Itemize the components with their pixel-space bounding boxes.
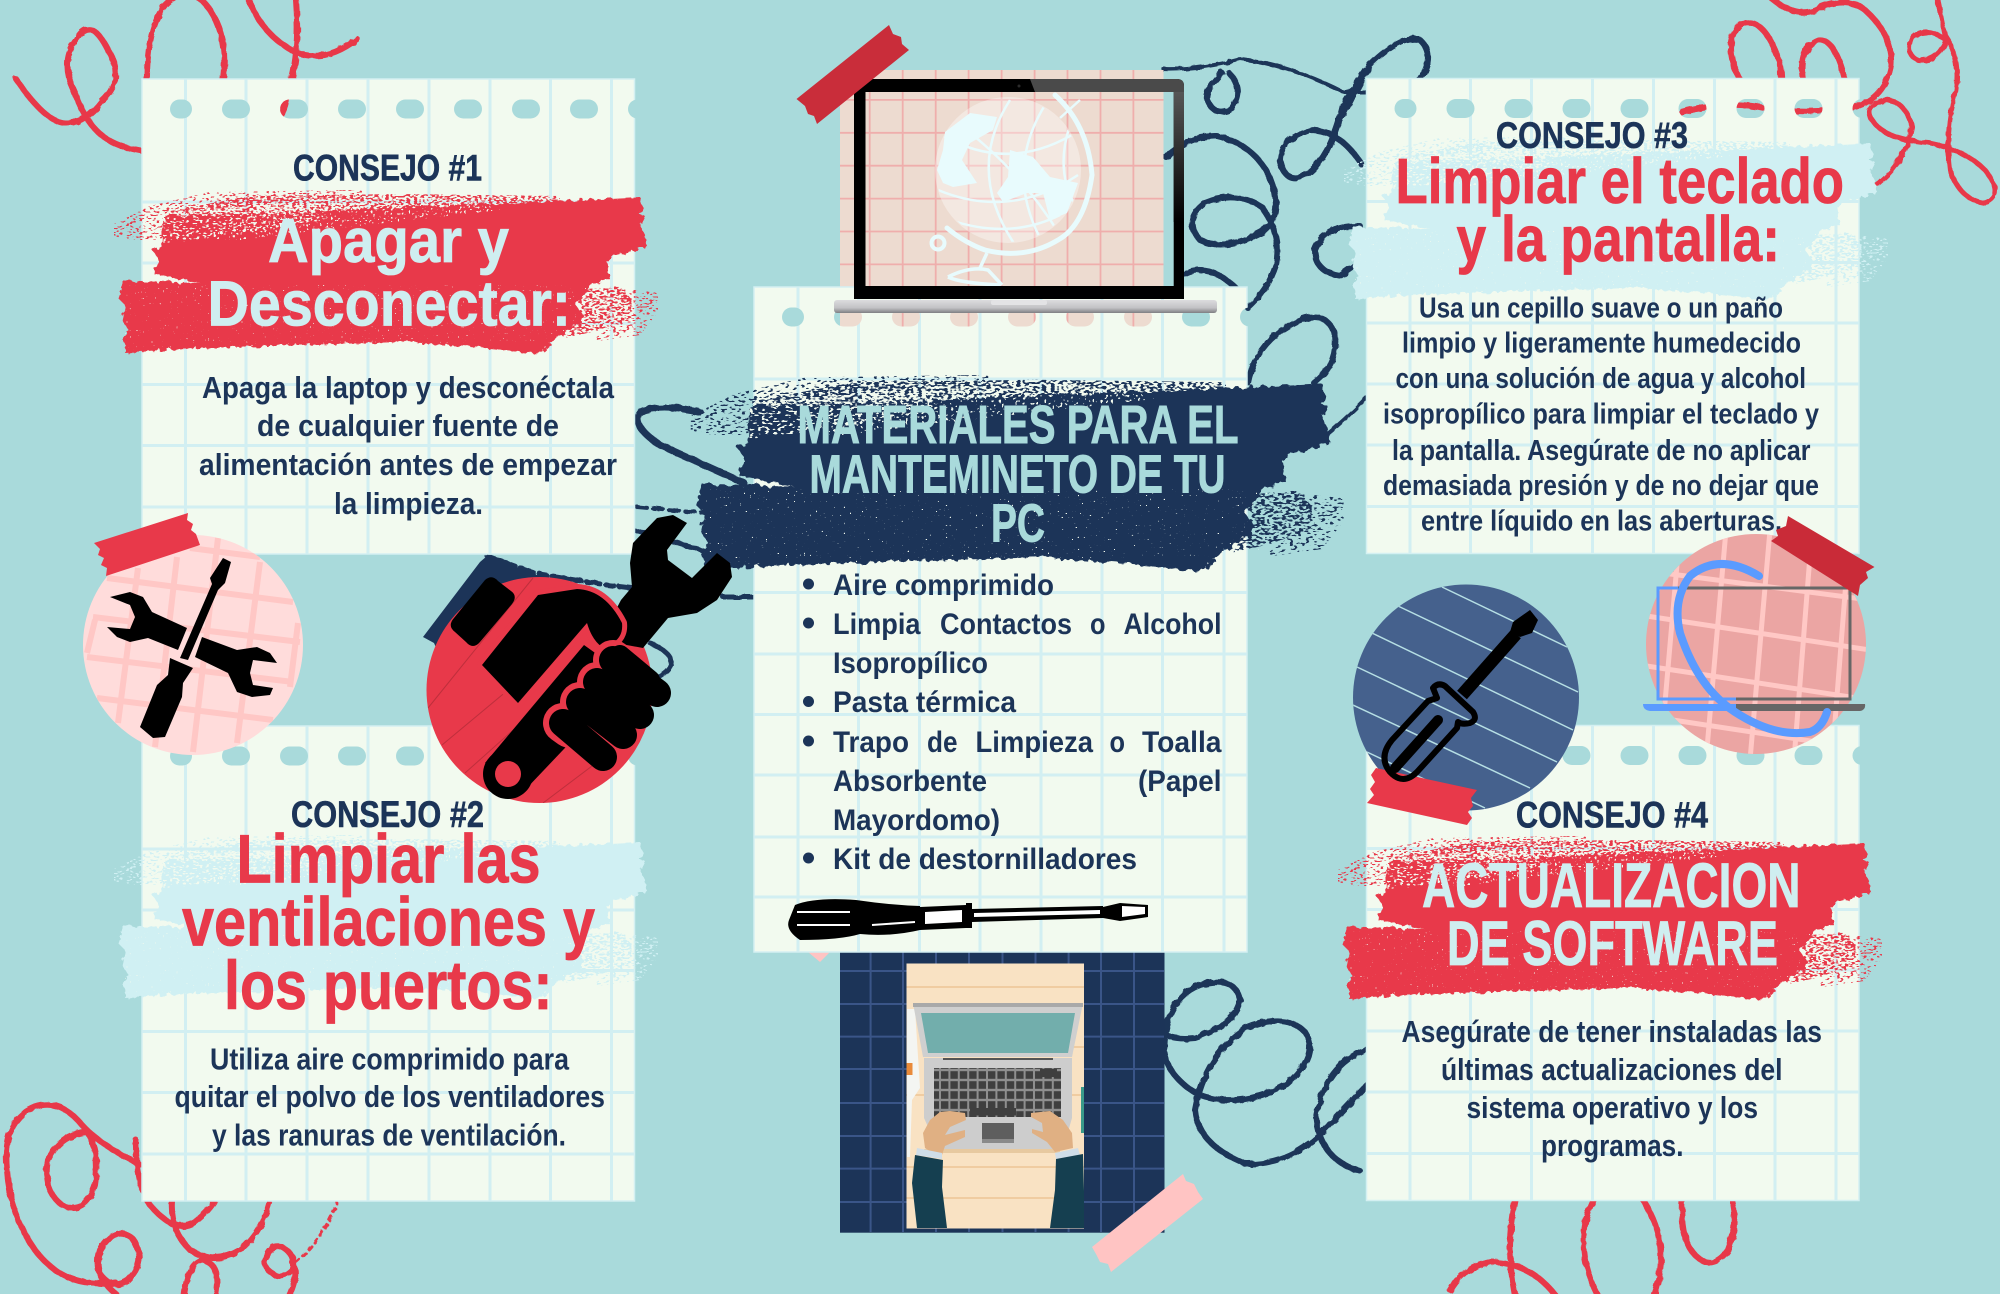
heading: materiales para el mantenimeto de tu pc: PC — [991, 494, 1045, 554]
body text: consejo 3: entre líquido en las aberturas. — [1421, 506, 1782, 538]
bullet list: materiales: Limpia — [833, 608, 921, 641]
body text: consejo 4: últimas actualizaciones del — [1441, 1052, 1782, 1087]
icon: crossed wrench and screwdriver — [107, 558, 277, 738]
laptop with globe on screen — [834, 79, 1217, 313]
body text: consejo 1 — [199, 370, 617, 521]
hand palm — [482, 589, 622, 703]
bullet list: materiales: Isopropílico — [833, 647, 988, 680]
bullet list: materiales: Alcohol — [1124, 608, 1222, 641]
bullet list: materiales: (Papel — [1138, 765, 1222, 798]
body text: consejo 3: limpio y ligeramente humedecido — [1402, 328, 1801, 360]
panel: materiales — [691, 287, 1344, 952]
body text: consejo 3: la pantalla. Asegúrate de no aplicar — [1392, 435, 1810, 467]
red scribble: bottom right — [1450, 1200, 1734, 1294]
body text: consejo 1: alimentación antes de empezar — [199, 447, 617, 482]
red scribble: top right — [1681, 0, 1995, 203]
body text: consejo 2 — [174, 1042, 605, 1152]
heading: materiales para el mantenimeto de tu pc — [798, 395, 1238, 554]
label: consejo 2: CONSEJO #2 — [291, 794, 484, 835]
body text: consejo 3: con una solución de agua y alcohol — [1396, 363, 1806, 395]
heading: actualizacion de software: DE SOFTWARE — [1447, 909, 1778, 979]
heading: limpiar el teclado: Limpiar el teclado — [1396, 145, 1844, 217]
body text: consejo 3: demasiada presión y de no dejar que — [1383, 470, 1819, 502]
heading: actualizacion de software: ACTUALIZACION — [1422, 851, 1800, 921]
red scribble: top left — [16, 0, 357, 151]
heading: limpiar el teclado — [1396, 145, 1844, 275]
heading: materiales para el mantenimeto de tu pc: MANTEMINETO DE TU — [810, 444, 1226, 504]
body text: consejo 3: Usa un cepillo suave o un paño — [1419, 292, 1783, 324]
red scribble: bottom left — [6, 1105, 337, 1294]
bottom navy grid image with laptop photo — [840, 930, 1164, 1233]
screwdriver — [1384, 610, 1538, 779]
label: consejo 3: CONSEJO #3 — [1496, 115, 1688, 156]
red tape: left circle — [94, 513, 200, 576]
bullet list: materiales — [803, 569, 1222, 876]
icon: blue circle with screwdriver — [1353, 584, 1579, 825]
body text: consejo 4 — [1402, 1014, 1822, 1163]
bullet list: materiales: de — [927, 726, 958, 759]
bullet list: materiales: Aire comprimido — [833, 569, 1054, 602]
body text: consejo 3: isopropílico para limpiar el teclado y — [1383, 398, 1819, 430]
icon: red circle with hand holding wrench — [423, 515, 732, 803]
label: consejo 4: CONSEJO #4 — [1516, 794, 1708, 836]
cuff — [451, 577, 515, 646]
label: consejo 1: CONSEJO #1 — [293, 148, 482, 188]
bottom pink tape — [1092, 1174, 1203, 1272]
panel: consejo 2 — [114, 726, 658, 1201]
body text: consejo 1: la limpieza. — [334, 486, 483, 521]
navy scribble: left of centre — [487, 408, 770, 677]
heading: apagar y desconectar — [208, 207, 571, 340]
bullet list: materiales: Contactos — [940, 608, 1072, 641]
small pink tape scrap — [808, 952, 830, 962]
navy scribble: upper centre right — [1163, 39, 1428, 438]
body text: consejo 2: y las ranuras de ventilación. — [212, 1118, 566, 1152]
wrench handle — [483, 645, 620, 799]
body text: consejo 2: Utiliza aire comprimido para — [210, 1042, 570, 1076]
laptop outline icon — [1643, 564, 1865, 733]
bullet list: materiales: Toalla — [1142, 726, 1222, 759]
body text: consejo 3 — [1383, 292, 1819, 538]
laptop bezel — [854, 79, 1184, 299]
dark red tape: right circle — [1771, 516, 1874, 596]
globe illustration — [932, 95, 1092, 285]
bullet list: materiales: o — [1090, 608, 1106, 641]
heading: limpiar las ventilaciones: Limpiar las — [236, 820, 540, 898]
bullet list: materiales: Pasta térmica — [833, 686, 1016, 719]
pink grid image behind laptop — [840, 70, 1164, 330]
icon: pink circle with crossed tools — [83, 513, 303, 755]
top red tape — [796, 25, 909, 124]
bullet list: materiales: Limpieza — [976, 726, 1093, 759]
bullet list: materiales: Mayordomo) — [833, 804, 1000, 837]
body text: consejo 2: quitar el polvo de los ventiladores — [174, 1079, 605, 1114]
bullet list: materiales: Absorbente — [833, 765, 987, 798]
wrench head — [600, 515, 732, 648]
navy scribble: lower centre right — [1164, 982, 1367, 1171]
heading: materiales para el mantenimeto de tu pc: MATERIALES PARA EL — [798, 395, 1238, 455]
heading: limpiar las ventilaciones: ventilaciones y — [182, 884, 595, 960]
icon: pink circle with blue and grey laptop — [1640, 516, 1874, 760]
body text: consejo 4: programas. — [1541, 1128, 1684, 1163]
heading: actualizacion de software — [1422, 851, 1800, 979]
laptop base — [834, 300, 1217, 313]
navy tape behind circle — [423, 556, 545, 659]
laptop on desk illustration — [906, 964, 1085, 1228]
red tape: blue circle — [1367, 768, 1477, 825]
body text: consejo 4: Asegúrate de tener instaladas las — [1402, 1014, 1822, 1049]
body text: consejo 1: Apaga la laptop y desconéctala — [202, 370, 615, 405]
heading: apagar y desconectar: Apagar y — [268, 207, 509, 276]
bullet list: materiales: o — [1110, 726, 1125, 759]
heading: limpiar las ventilaciones — [182, 820, 595, 1024]
heading: limpiar las ventilaciones: los puertos: — [224, 947, 552, 1024]
body text: consejo 1: de cualquier fuente de — [257, 408, 559, 443]
fist — [563, 655, 657, 757]
heading: limpiar el teclado: y la pantalla: — [1456, 203, 1780, 275]
bullet list: materiales: Trapo — [833, 726, 909, 759]
panel: consejo 4 — [1338, 726, 1882, 1200]
panel: consejo 1 — [114, 79, 658, 554]
panel: consejo 3 — [1344, 78, 1888, 554]
body text: consejo 4: sistema operativo y los — [1466, 1090, 1758, 1125]
heading: apagar y desconectar: Desconectar: — [208, 268, 571, 340]
icon: horizontal screwdriver — [788, 899, 1148, 940]
bullet list: materiales: Kit de destornilladores — [833, 843, 1137, 876]
